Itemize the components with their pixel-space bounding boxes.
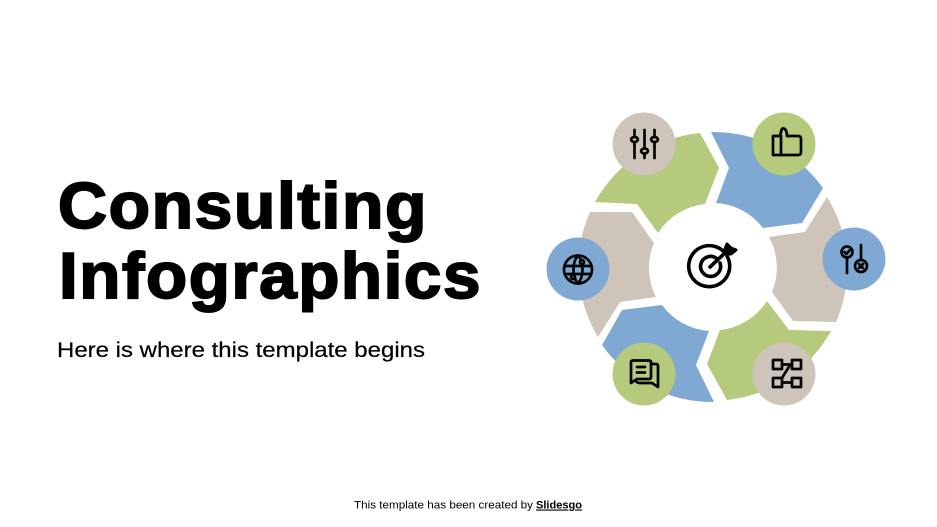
footer credit: Slidesgo — [536, 500, 582, 512]
badge: chat — [612, 342, 676, 406]
cycle diagram — [546, 112, 886, 406]
icon: sliders — [631, 130, 658, 158]
segment: blue upper right — [711, 132, 823, 228]
badge: globe — [546, 238, 610, 300]
title line 1: Consulting — [58, 169, 428, 242]
segment: beige left — [578, 212, 656, 337]
segment: beige right — [769, 197, 847, 322]
segment: green upper left — [595, 133, 719, 233]
badge: thumbs up — [752, 112, 816, 176]
icon: flowchart — [773, 360, 801, 387]
icon: target — [689, 244, 736, 287]
badge: flowchart — [752, 342, 816, 406]
icon: thumbs up — [773, 128, 801, 155]
icon: chat bubbles — [631, 360, 658, 387]
subtitle: Here is where this template begins — [57, 339, 425, 362]
segment: blue lower left — [602, 305, 714, 402]
badge: options — [822, 228, 886, 290]
icon: check and cross pins — [842, 245, 867, 273]
badge: sliders — [612, 112, 676, 176]
title line 2: Infographics — [59, 239, 482, 312]
icon: globe — [564, 256, 592, 284]
segment: green lower right — [707, 301, 831, 400]
title — [58, 169, 482, 312]
footer credit: This template has been created by — [354, 500, 534, 512]
